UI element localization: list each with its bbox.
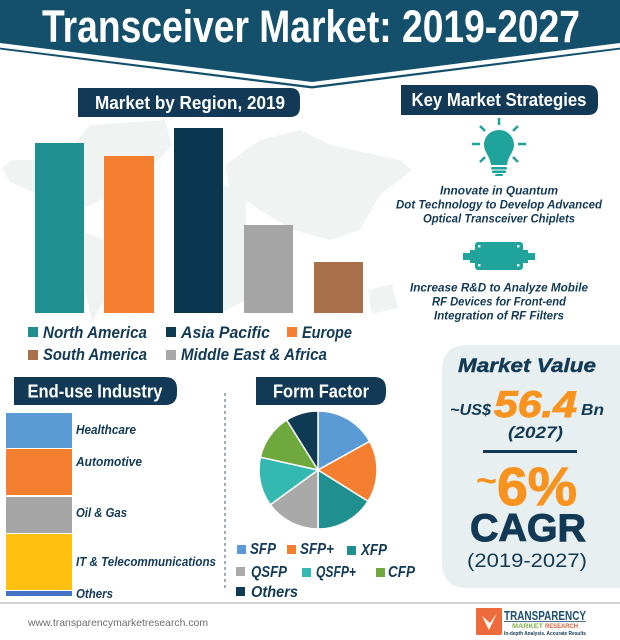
text: strategy two: Integration of RF Filters bbox=[434, 308, 564, 322]
legend: regions: Asia Pacific bbox=[180, 324, 270, 342]
logo: transparency market research bbox=[476, 608, 587, 637]
text: strategy two: Increase R&D to Analyze Mobile bbox=[410, 280, 588, 294]
stat: market value figure bbox=[450, 384, 604, 442]
logo: transparency market research: RESEARCH bbox=[545, 623, 578, 630]
bar chart: market by region bbox=[35, 128, 363, 313]
stat: CAGR: ~ bbox=[476, 462, 497, 500]
legend: form factor: Others bbox=[251, 584, 298, 601]
legend: form factor: SFP+ bbox=[300, 541, 334, 558]
legend: form factor: QSFP+ bbox=[316, 564, 356, 581]
legend: form factor: SFP bbox=[250, 541, 277, 558]
labels: end-use industry: Oil & Gas bbox=[76, 506, 127, 520]
heading: market by region: Market by Region, 2019 bbox=[95, 92, 285, 113]
legend: regions: South America bbox=[43, 346, 147, 364]
labels: end-use industry: Healthcare bbox=[76, 423, 136, 437]
labels: end-use industry: Others bbox=[76, 587, 113, 601]
stat: market value figure: ~US$ bbox=[450, 402, 492, 419]
heading: end-use industry: End-use Industry bbox=[28, 380, 163, 402]
text: strategy two bbox=[410, 280, 588, 322]
legend: regions: Europe bbox=[302, 324, 352, 342]
heading: market by region bbox=[78, 88, 300, 117]
heading: form factor: Form Factor bbox=[273, 380, 369, 402]
heading: form factor bbox=[256, 377, 386, 405]
text: strategy two: RF Devices for Front-end bbox=[432, 294, 567, 308]
logo: transparency market research: TRANSPARENCY bbox=[504, 609, 587, 623]
legend: regions: North America bbox=[43, 324, 147, 342]
text: strategy one bbox=[396, 184, 603, 226]
heading: end-use industry bbox=[14, 377, 177, 405]
stat: CAGR: 6% bbox=[497, 457, 577, 517]
pie chart: form factor bbox=[259, 411, 377, 529]
heading: key market strategies: Key Market Strategies bbox=[412, 89, 586, 110]
legend: form factor bbox=[236, 541, 416, 601]
legend: form factor: XFP bbox=[360, 542, 388, 559]
stat: CAGR: CAGR bbox=[470, 507, 586, 550]
text: strategy one: Optical Transceiver Chiplets bbox=[423, 212, 575, 226]
icon: light bulb bbox=[472, 118, 526, 176]
labels: end-use industry: Automotive bbox=[75, 455, 142, 469]
legend: form factor: QSFP bbox=[251, 564, 288, 581]
stat: CAGR bbox=[467, 457, 587, 572]
labels: end-use industry: IT & Telecommunications bbox=[76, 555, 216, 569]
stat: CAGR: (2019-2027) bbox=[467, 551, 587, 572]
stat: market value figure: (2027) bbox=[508, 424, 564, 442]
heading: market value: Market Value bbox=[458, 356, 597, 377]
icon: RF filter chip bbox=[463, 242, 535, 270]
text: strategy one: Dot Technology to Develop Advanced bbox=[396, 198, 603, 212]
background world map bbox=[2, 120, 412, 322]
panel: market value bbox=[442, 345, 620, 588]
legend: regions bbox=[28, 324, 352, 364]
legend: form factor: CFP bbox=[388, 564, 416, 581]
stat: market value figure: Bn bbox=[581, 402, 604, 419]
stat: market value figure: 56.4 bbox=[494, 384, 577, 425]
text: strategy one: Innovate in Quantum bbox=[440, 184, 558, 198]
legend: regions: Middle East & Africa bbox=[181, 346, 327, 364]
labels: end-use industry bbox=[75, 423, 216, 601]
heading: key market strategies bbox=[401, 85, 598, 115]
title banner bbox=[0, 0, 620, 87]
stacked bar: end-use industry bbox=[6, 413, 72, 596]
logo: transparency market research: MARKET bbox=[512, 623, 543, 630]
footer url: www.transparencymarketresearch.com bbox=[27, 617, 208, 629]
logo: transparency market research: In-depth Analysis. Accurate Results bbox=[504, 631, 586, 637]
